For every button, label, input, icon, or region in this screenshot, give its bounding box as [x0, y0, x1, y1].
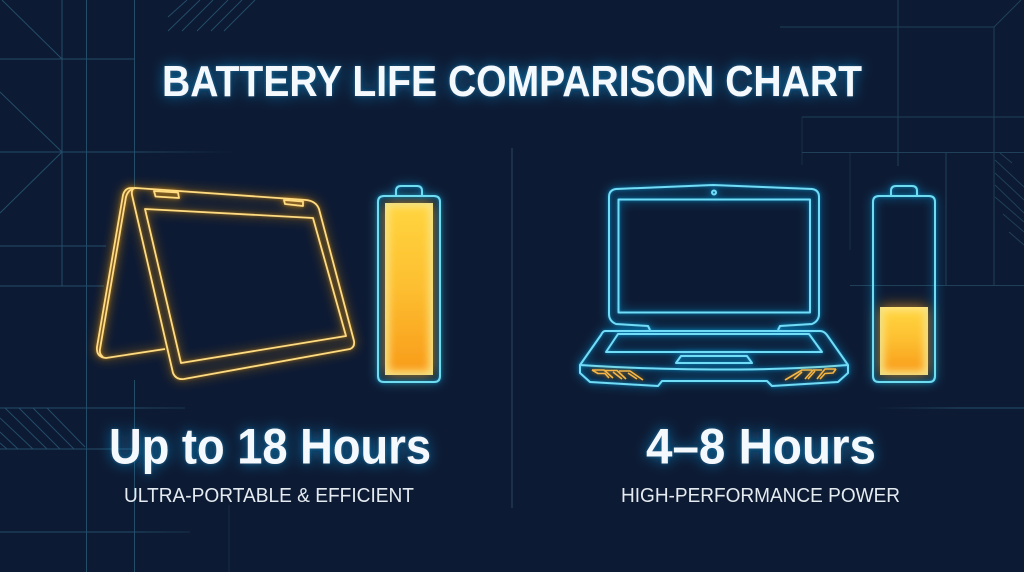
subtitle: ultra-portable: ULTRA-PORTABLE & EFFICIENT [124, 485, 414, 507]
icon: battery full [378, 186, 440, 382]
background circuit lines: left [0, 0, 255, 572]
battery charge fill [385, 203, 433, 375]
subtitle: high-performance: HIGH-PERFORMANCE POWER [621, 485, 900, 507]
battery outline [378, 186, 440, 382]
battery charge fill [880, 307, 928, 375]
icon: laptop vents [592, 369, 836, 380]
panel: laptop [580, 185, 935, 507]
battery outline [873, 186, 935, 382]
icon: laptop [580, 185, 848, 386]
background circuit lines: right [229, 0, 1024, 572]
icon: battery low [873, 186, 935, 382]
title: BATTERY LIFE COMPARISON CHART [162, 57, 862, 106]
center divider [511, 148, 513, 508]
icon: tablet in tent mode [97, 188, 354, 379]
panel: tablet [97, 186, 440, 507]
hours: 4-8 hours: 4–8 Hours [646, 418, 876, 474]
hours: up to 18 hours: Up to 18 Hours [109, 418, 431, 474]
